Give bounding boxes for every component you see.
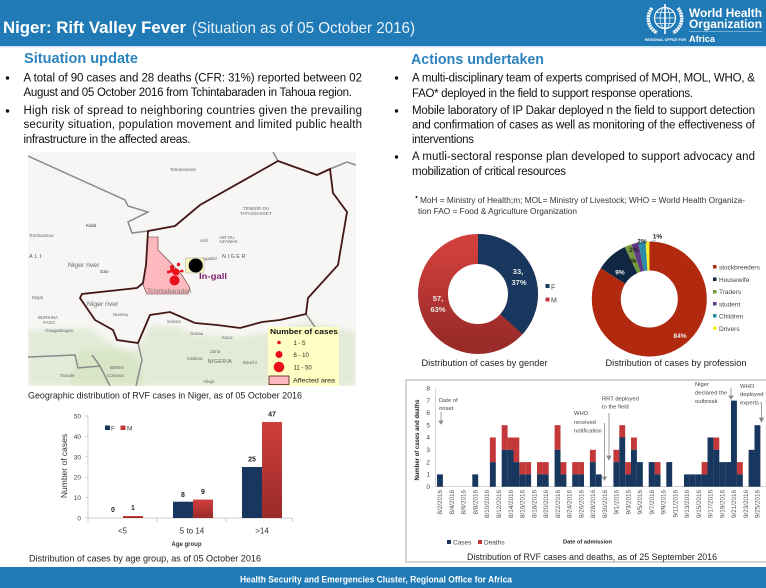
text block: situation bullets: August and 05 October 2016 from Tchintabaraden in Tahoua region. bbox=[24, 87, 352, 99]
date labels: 8/12/2016 bbox=[496, 490, 503, 518]
place names: Cotonou bbox=[107, 373, 125, 378]
donut chart: profession bbox=[590, 234, 761, 358]
date labels: 9/21/2016 bbox=[731, 490, 738, 518]
footnote: tion FAO = Food & Agriculture Organization bbox=[418, 207, 577, 216]
axis title: number of cases and deaths: Number of cases and deaths bbox=[414, 399, 421, 480]
WHO wordmark: World Health bbox=[689, 8, 762, 20]
annotations and arrows: notification bbox=[574, 428, 602, 434]
heading: situation update: Situation update bbox=[24, 51, 138, 67]
annotations and arrows: WHO bbox=[740, 384, 755, 390]
chart legend: Cases bbox=[453, 540, 472, 546]
annotations and arrows: experts bbox=[740, 400, 759, 406]
In-gall marker bbox=[186, 258, 204, 273]
axis title: date of admission: Date of admission bbox=[563, 540, 612, 546]
map: Niger case distribution: Tchintabaraden bbox=[147, 288, 192, 295]
place names: TAFASSASSET bbox=[240, 211, 272, 216]
date labels: 9/13/2016 bbox=[684, 490, 691, 518]
date labels: 8/6/2016 bbox=[461, 490, 468, 515]
date labels: 8/28/2016 bbox=[590, 490, 597, 518]
panel: epidemic curve: 8 bbox=[426, 386, 430, 392]
date labels bbox=[437, 490, 762, 518]
legend: gender: M bbox=[551, 298, 557, 304]
legend: profession bbox=[713, 264, 761, 333]
footer banner bbox=[0, 567, 766, 588]
donut chart: profession: 2% bbox=[637, 238, 647, 246]
title bbox=[3, 18, 415, 37]
map legend: 6 - 10 bbox=[294, 353, 310, 359]
annotations and arrows: Date of bbox=[439, 398, 458, 404]
date labels: 9/7/2016 bbox=[649, 490, 656, 515]
text block: actions bullets: A multi-disciplinary team of experts comprised of MOH, MOL, WHO, & bbox=[412, 73, 755, 85]
panel: epidemic curve: 2 bbox=[426, 459, 430, 466]
annotations and arrows: WHO bbox=[574, 411, 589, 417]
bars bbox=[123, 422, 282, 518]
WHO wordmark: REGIONAL OFFICE FOR bbox=[645, 38, 686, 42]
panel: epidemic curve: 5 bbox=[426, 422, 430, 429]
affected area bbox=[143, 237, 190, 294]
place names: Kaduna bbox=[187, 356, 203, 361]
map legend: 1 - 5 bbox=[294, 341, 306, 347]
place names: Tombouctou bbox=[29, 233, 54, 238]
place names: TENERE DU bbox=[243, 206, 269, 211]
donut chart: profession: 84% bbox=[673, 333, 687, 340]
annotations and arrows: outbreak bbox=[695, 399, 718, 405]
annotations and arrows bbox=[439, 382, 764, 480]
chart legend: F bbox=[111, 426, 115, 432]
legend: profession: student bbox=[719, 302, 741, 308]
bar chart: cases by age group: 0 bbox=[77, 516, 81, 522]
place names: Niamey bbox=[113, 312, 129, 317]
footnote bbox=[416, 196, 745, 216]
text block: situation bullets: security situation, population movement and limited public health bbox=[24, 119, 362, 131]
panel: epidemic curve: 0 bbox=[426, 484, 430, 491]
legend: profession: Children bbox=[719, 314, 744, 320]
text block: situation bullets: infrastructure in the affected areas. bbox=[24, 134, 190, 146]
date labels: 8/16/2016 bbox=[520, 490, 526, 518]
panel: epidemic curve: 6 bbox=[426, 410, 430, 417]
place names: BURKINA bbox=[38, 315, 58, 320]
place names: Agadez bbox=[202, 256, 218, 261]
icon: WHO emblem bbox=[648, 4, 682, 34]
bar chart: cases by age group: 9 bbox=[201, 489, 205, 496]
place names: Kidal bbox=[86, 223, 96, 228]
text block: actions bullets: mobilization of critical resources bbox=[412, 166, 566, 178]
footnote: MoH = Ministry of Health;m; MOL= Ministry of Livestock; WHO = World Health Organiza- bbox=[420, 196, 745, 205]
chart legend: Deaths bbox=[484, 540, 505, 546]
annotations and arrows: declared the bbox=[695, 390, 727, 396]
donut chart: profession: 1% bbox=[653, 234, 662, 240]
date labels: 9/3/2016 bbox=[625, 490, 632, 515]
legend: gender bbox=[546, 284, 557, 304]
annotations and arrows: RRT deployed bbox=[602, 396, 639, 402]
place names: Tamale bbox=[60, 373, 75, 378]
donut chart: gender bbox=[430, 249, 557, 339]
bar chart: cases by age group: 20 bbox=[74, 475, 81, 482]
date labels: 9/23/2016 bbox=[743, 490, 750, 518]
map: Niger case distribution bbox=[28, 152, 356, 386]
date labels: 8/10/2016 bbox=[484, 490, 491, 518]
bar chart: cases by age group: 1 bbox=[131, 505, 135, 512]
date labels: 9/1/2016 bbox=[614, 490, 621, 515]
bar chart: cases by age group: 30 bbox=[74, 454, 81, 461]
legend: gender: F bbox=[551, 284, 555, 292]
caption: age group: Distribution of cases by age group, as of 05 October 2016 bbox=[29, 554, 261, 564]
text block: actions bullets: interventions bbox=[412, 134, 474, 146]
place names bbox=[29, 167, 272, 384]
date labels: 9/25/2016 bbox=[755, 490, 762, 518]
date labels: 8/4/2016 bbox=[449, 490, 456, 515]
date labels: 9/17/2016 bbox=[708, 490, 715, 518]
place names: Zaria bbox=[210, 349, 221, 354]
map: Niger case distribution: NIGER bbox=[222, 254, 247, 260]
date labels: 9/9/2016 bbox=[661, 490, 668, 515]
WHO wordmark: Africa bbox=[689, 34, 716, 44]
legend: profession: Traders bbox=[719, 289, 742, 296]
map: Niger case distribution: NIGERIA bbox=[208, 359, 232, 365]
axis title: number of cases: Number of cases bbox=[59, 434, 69, 498]
caption: map: Geographic distribution of RVF cases in Niger, as of 05 October 2016 bbox=[28, 390, 302, 400]
bars: cases bbox=[437, 401, 760, 487]
place names: Gusau bbox=[190, 331, 204, 336]
chart legend bbox=[105, 426, 132, 432]
panel: epidemic curve bbox=[406, 380, 766, 562]
label: In-gall: In-gall bbox=[199, 272, 227, 281]
date labels: 9/19/2016 bbox=[719, 490, 726, 518]
map: Niger case distribution: ALI bbox=[29, 254, 43, 260]
annotations and arrows: deployed bbox=[740, 392, 764, 398]
bar chart: cases by age group: 5 to 14 bbox=[180, 526, 205, 536]
date labels: 8/2/2016 bbox=[437, 490, 444, 515]
panel: epidemic curve: 3 bbox=[426, 447, 430, 454]
map: Niger case distribution: Niger river bbox=[68, 262, 100, 269]
header banner bbox=[0, 0, 766, 48]
place names: Abuja bbox=[203, 379, 215, 384]
text block: actions bullets: A mutli-sectoral response plan developed to support advocacy and bbox=[412, 151, 755, 163]
terrain bbox=[28, 322, 356, 386]
bars: deaths bbox=[490, 425, 743, 474]
annotations and arrows: to the field bbox=[602, 404, 629, 410]
caption: epidemic curve: Distribution of RVF cases and deaths, as of 25 September 2016 bbox=[467, 552, 717, 562]
title: (Situation as of 05 October 2016) bbox=[192, 20, 415, 37]
date labels: 9/15/2016 bbox=[696, 490, 703, 518]
annotations and arrows: received bbox=[574, 420, 596, 426]
donut chart: profession: 9% bbox=[615, 270, 625, 276]
map legend bbox=[268, 327, 339, 386]
date labels: 8/30/2016 bbox=[602, 490, 609, 518]
text block: actions bullets: FAO* deployed in the field to support response operations. bbox=[412, 88, 693, 100]
bar chart: cases by age group: 47 bbox=[268, 412, 276, 418]
date labels: 8/14/2016 bbox=[508, 490, 515, 518]
chart legend: M bbox=[127, 426, 132, 432]
date labels: 8/24/2016 bbox=[566, 490, 574, 518]
bar chart: cases by age group: <5 bbox=[118, 526, 128, 536]
map: Niger case distribution: Niger river bbox=[87, 301, 119, 308]
bar chart: cases by age group: 8 bbox=[181, 492, 185, 499]
heading: actions undertaken: Actions undertaken bbox=[411, 52, 544, 68]
text block: actions bullets: Mobile laboratory of IP Dakar deployed n the field to support detection bbox=[412, 105, 755, 117]
place names: BENIN bbox=[110, 365, 124, 370]
bar chart: cases by age group: 0 bbox=[111, 507, 115, 514]
WHO wordmark: Organization bbox=[689, 19, 762, 31]
legend: profession: Drivers bbox=[719, 326, 740, 333]
place names: Bauchi bbox=[243, 360, 257, 365]
caption: gender: Distribution of cases by gender bbox=[422, 358, 548, 368]
neighbouring borders bbox=[28, 152, 356, 386]
y axis bbox=[436, 388, 766, 487]
bar chart: cases by age group: 50 bbox=[74, 414, 81, 420]
bar chart: cases by age group: 25 bbox=[248, 456, 256, 464]
place names: AIR OU bbox=[219, 235, 235, 240]
Niger border bbox=[80, 161, 347, 343]
legend: profession: stockbreeders bbox=[719, 264, 761, 272]
place names: Mopti bbox=[32, 295, 43, 300]
date labels: 8/22/2016 bbox=[555, 490, 562, 518]
donut chart: gender: 63% bbox=[430, 305, 446, 314]
text block: situation bullets: A total of 90 cases and 28 deaths (CFR: 31%) reported between 02 bbox=[24, 72, 362, 84]
place names: Ouagadougou bbox=[45, 328, 74, 333]
text block: actions bullets bbox=[395, 73, 756, 178]
place names: Tamanrasset bbox=[170, 167, 197, 172]
bar chart: cases by age group: >14 bbox=[255, 526, 269, 536]
place names: Sokoto bbox=[167, 319, 182, 324]
WHO wordmark bbox=[645, 8, 762, 44]
text block: actions bullets: and confirmation of cases as well as monitoring of the effectiveness of bbox=[412, 120, 756, 132]
place names: Gao bbox=[100, 269, 109, 274]
chart legend bbox=[447, 540, 505, 546]
footer banner: Health Security and Emergencies Cluster, Regional Office for Africa bbox=[240, 574, 513, 586]
place names: AZAWAK bbox=[219, 239, 238, 244]
place names: Arlit bbox=[200, 238, 208, 243]
donut chart: profession: 2% bbox=[627, 258, 637, 265]
panel: epidemic curve: 1 bbox=[426, 472, 430, 479]
axis title: age group: Age group bbox=[172, 542, 202, 548]
date labels: 8/26/2016 bbox=[578, 490, 585, 518]
legend: profession: Housewife bbox=[719, 277, 750, 284]
date labels: 9/11/2016 bbox=[672, 490, 679, 518]
annotations and arrows: onset bbox=[439, 406, 454, 412]
case circles bbox=[167, 263, 184, 286]
title: Niger: Rift Valley Fever bbox=[3, 18, 186, 37]
date labels: 8/8/2016 bbox=[472, 490, 480, 515]
date labels: 8/20/2016 bbox=[543, 490, 550, 518]
annotations and arrows: Niger bbox=[695, 382, 709, 388]
map legend: Number of cases bbox=[270, 327, 338, 336]
donut chart: gender: 37% bbox=[511, 278, 527, 287]
bar chart: cases by age group bbox=[59, 412, 292, 548]
donut chart: gender: 57, bbox=[433, 294, 443, 303]
panel: epidemic curve: 4 bbox=[426, 435, 430, 442]
text block: situation bullets: High risk of spread to neighboring countries given the prevailing bbox=[24, 105, 362, 117]
donut chart: gender: 33, bbox=[513, 267, 523, 276]
place names: FASO bbox=[43, 320, 56, 325]
caption: profession: Distribution of cases by profession bbox=[606, 358, 746, 368]
place names: Kano bbox=[222, 335, 233, 340]
date labels: 9/5/2016 bbox=[637, 490, 644, 515]
panel: epidemic curve: 7 bbox=[426, 398, 430, 405]
bar chart: cases by age group: 10 bbox=[74, 495, 81, 502]
bar chart: cases by age group: 40 bbox=[74, 434, 81, 441]
donut chart: profession: 2% bbox=[629, 247, 639, 254]
map legend: 11 - 50 bbox=[294, 366, 312, 372]
map legend: Affected area bbox=[293, 378, 336, 384]
text block: situation bullets bbox=[6, 72, 362, 146]
date labels: 8/18/2016 bbox=[531, 490, 538, 518]
